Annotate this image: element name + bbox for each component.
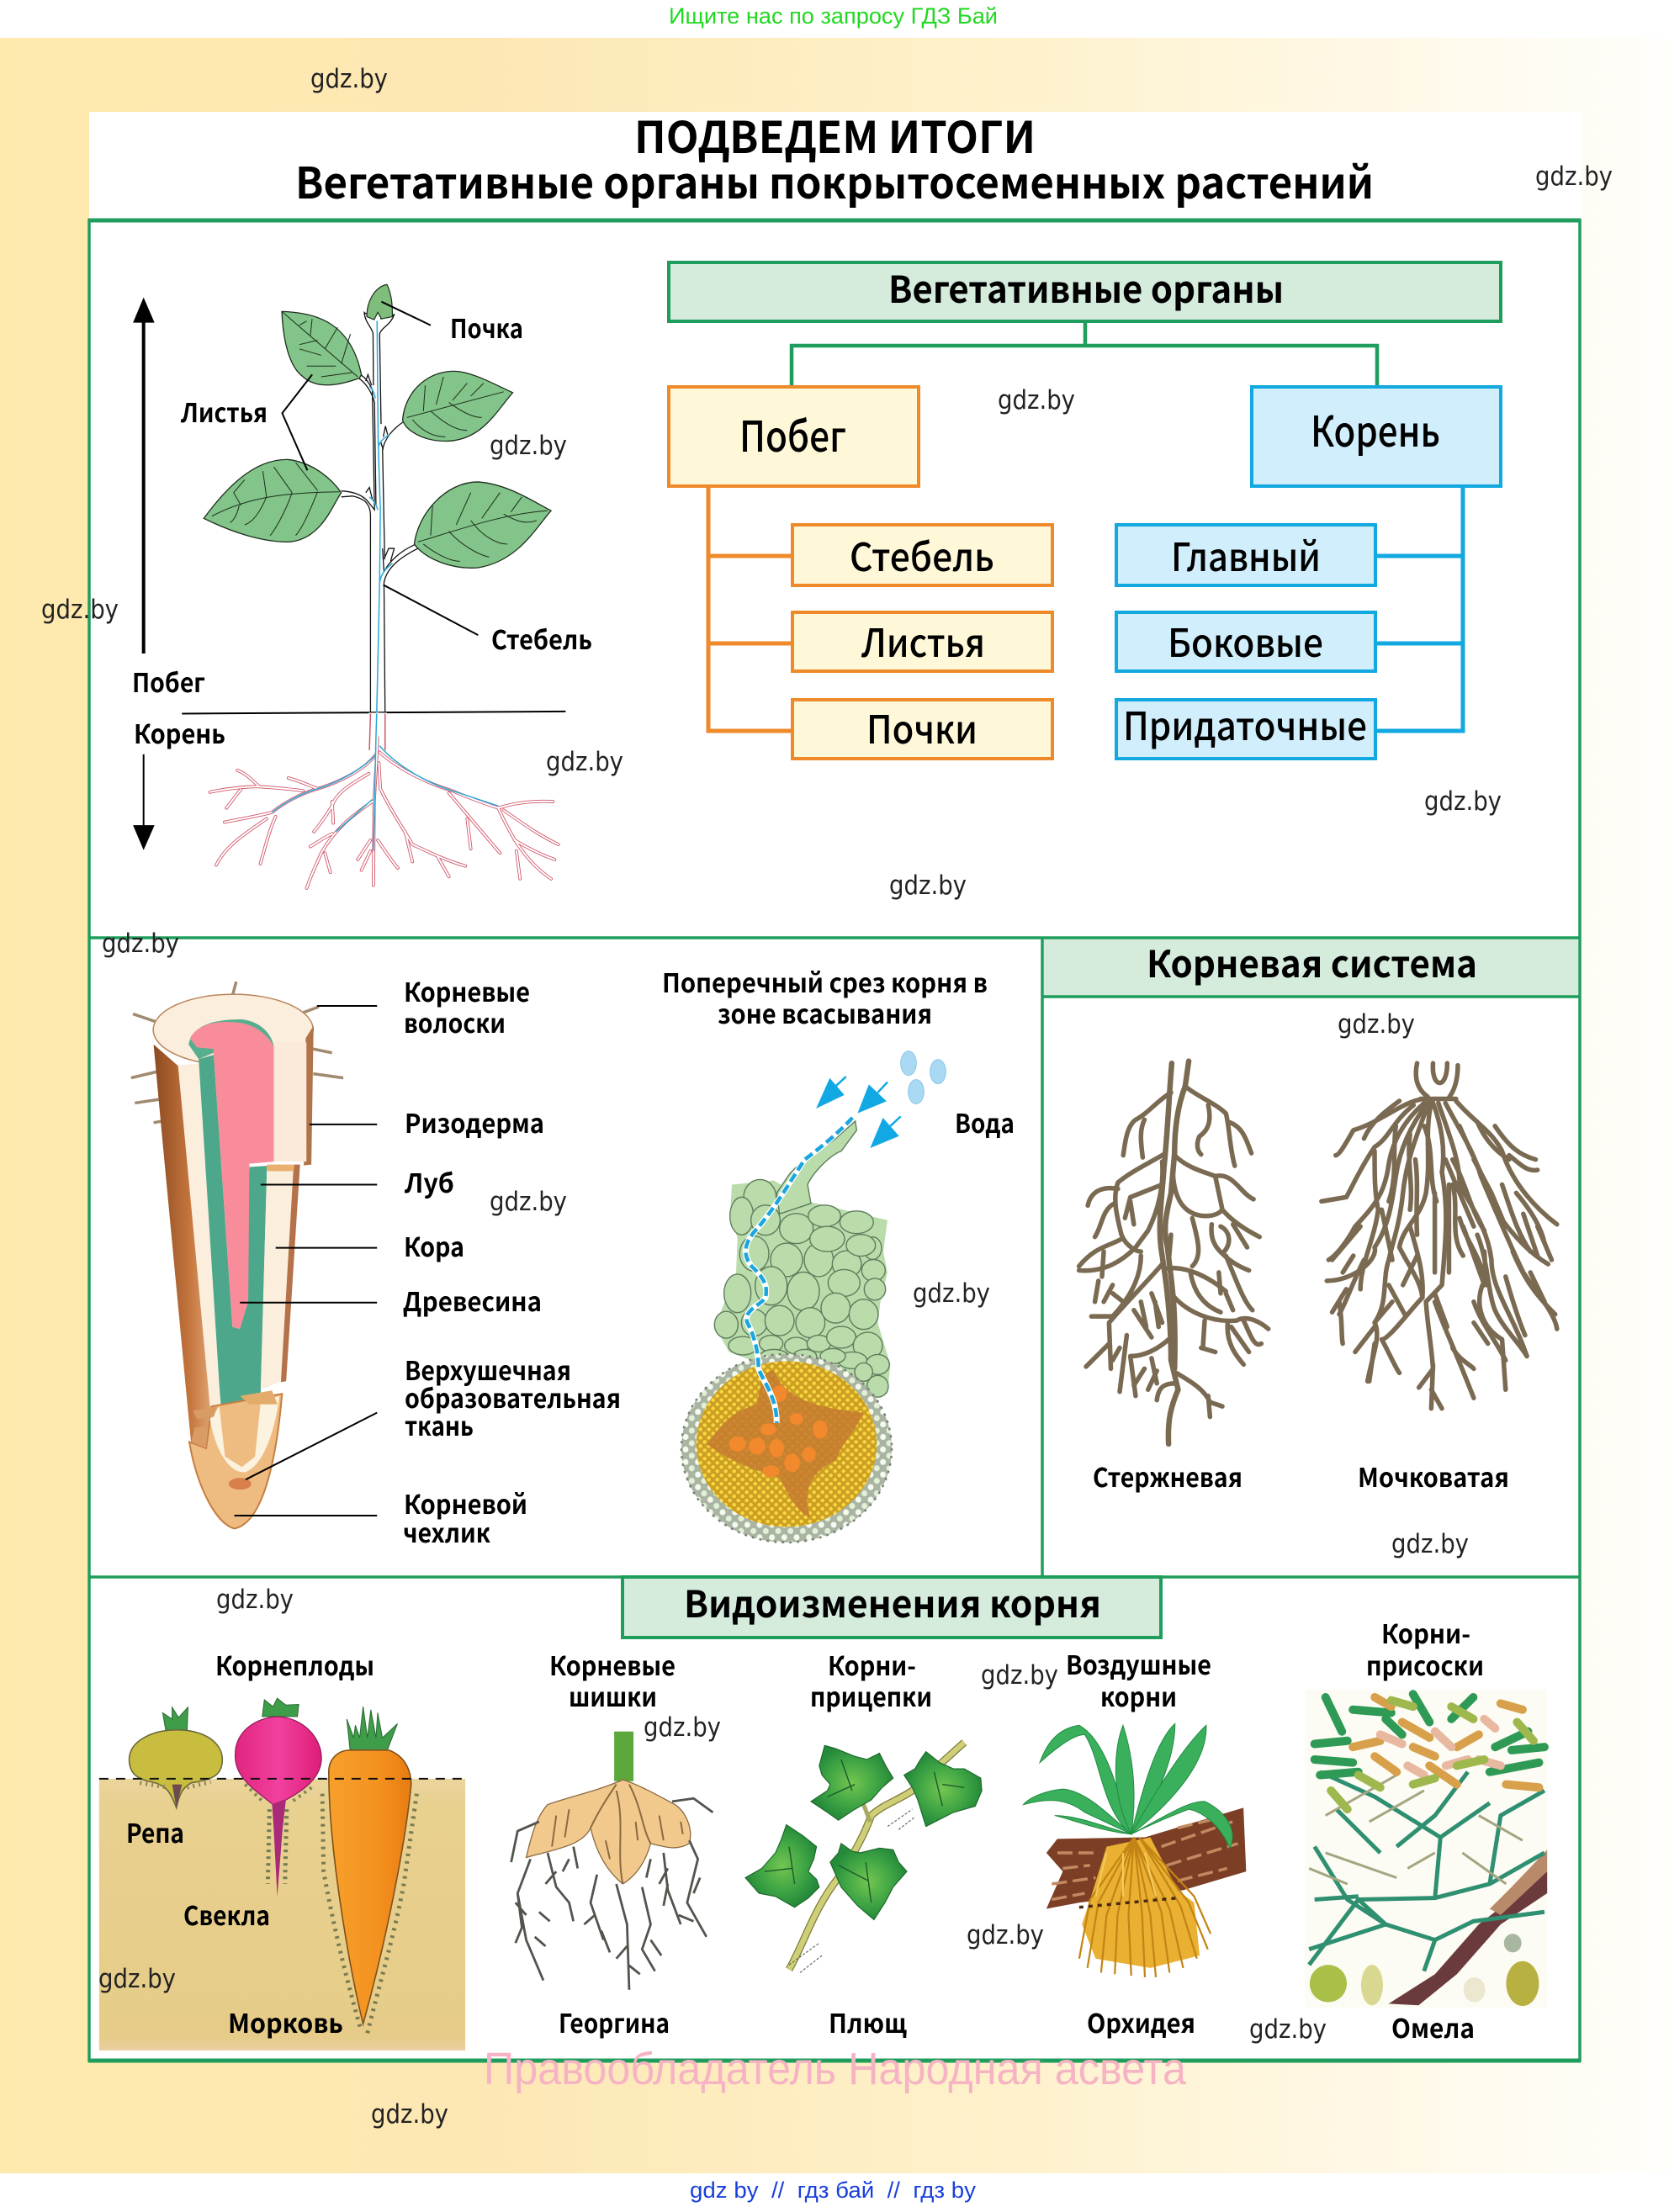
xylem pink: [190, 1022, 273, 1329]
root section labels: [403, 971, 621, 1550]
title: Вегетативные органы покрытосеменных растений: [295, 149, 1374, 211]
stem: [342, 312, 418, 713]
gdz.by watermarks: gdz.by: [490, 431, 567, 461]
root system labels: Мочковатая: [1358, 1457, 1509, 1495]
root system labels: [1093, 1457, 1509, 1495]
water arrows: [819, 1077, 901, 1146]
carrot: [322, 1707, 416, 2034]
bottom link text: gdz by // гдз бай // гдз by: [690, 2178, 977, 2203]
icon: mistletoe: [1305, 1690, 1547, 2008]
cross-section heading: зоне всасывания: [718, 993, 932, 1031]
gdz.by watermarks: gdz.by: [1535, 161, 1613, 192]
mistletoe labels: [1366, 1613, 1484, 2045]
gdz.by watermarks: gdz.by: [889, 871, 967, 901]
right cortex lower: [261, 1165, 295, 1389]
orchid labels: [1066, 1644, 1211, 2040]
arrow: root down: [133, 754, 155, 850]
icon: plant diagram: [133, 284, 565, 888]
blue connectors: [1375, 486, 1463, 731]
orchid labels: Воздушные: [1066, 1644, 1211, 1682]
root section labels: Корневые: [404, 971, 530, 1009]
water path: [746, 1118, 852, 1423]
cortex cells: [714, 1121, 889, 1397]
box: main root: [1116, 525, 1375, 585]
icon: root cross-section with water path: [681, 1051, 946, 1543]
modifications heading: [623, 1574, 1161, 1638]
root section labels: Верхушечная: [405, 1350, 571, 1388]
orchid labels: корни: [1100, 1676, 1177, 1714]
roots: [1082, 1837, 1200, 1968]
root hairs: [131, 982, 343, 1123]
bark: [1046, 1807, 1246, 1909]
box: main root: Главный: [1171, 527, 1321, 583]
root section labels: образовательная: [405, 1378, 621, 1416]
dahlia labels: шишки: [569, 1676, 657, 1714]
root system heading: Корневая система: [1147, 934, 1477, 988]
root section labels: ткань: [405, 1405, 474, 1443]
cross-section heading: [662, 962, 988, 1031]
gdz.by watermarks: gdz.by: [490, 1187, 567, 1217]
green connectors: [792, 321, 1377, 387]
bud: [367, 284, 392, 320]
leader lines: [282, 302, 478, 635]
green branches: [1309, 1772, 1544, 1971]
scheme heading: [669, 260, 1501, 321]
orchid labels: Орхидея: [1087, 2003, 1195, 2040]
title: ПОДВЕДЕМ ИТОГИ: [634, 103, 1036, 166]
root section labels: Кора: [404, 1226, 464, 1264]
icon: tap root system: [1079, 1061, 1269, 1444]
gdz.by watermarks: gdz.by: [1391, 1529, 1469, 1559]
modifications heading: Видоизменения корня: [684, 1574, 1101, 1628]
ivy labels: Корни-: [828, 1645, 916, 1683]
plant labels: Листья: [180, 392, 268, 430]
water label: Вода: [955, 1103, 1015, 1140]
turnip: [130, 1707, 222, 1807]
root crop labels: [126, 1645, 374, 2040]
cross-section heading: Поперечный срез корня в: [662, 962, 988, 1000]
water drops: [901, 1051, 946, 1103]
gdz.by watermarks: gdz.by: [967, 1920, 1044, 1950]
stele top green: [188, 1019, 273, 1059]
icon: root crops: [99, 1698, 465, 2051]
plant labels: Почка: [450, 308, 523, 346]
soil surface dashes: [99, 1778, 465, 1780]
box: adventitious roots: Придаточные: [1123, 696, 1367, 752]
ivy labels: прицепки: [810, 1676, 932, 1714]
root conducting tissue: [272, 713, 498, 851]
panel: vegetative organs scheme: [669, 260, 1501, 759]
gdz.by watermarks: gdz.by: [913, 1278, 990, 1309]
root section labels: Ризодерма: [405, 1103, 544, 1140]
gdz.by watermarks: gdz.by: [981, 1660, 1058, 1691]
box: leaves: [792, 612, 1052, 671]
top cut: [153, 994, 313, 1066]
mistletoe labels: Омела: [1391, 2008, 1475, 2045]
plant labels: [132, 308, 592, 751]
box: buds: Почки: [866, 700, 978, 755]
ivy labels: Плющ: [829, 2003, 907, 2040]
gdz.by watermarks: gdz.by: [546, 747, 623, 777]
leaf veins: [212, 311, 548, 561]
icon: dahlia tubers: [511, 1732, 713, 1990]
root section labels: чехлик: [403, 1512, 490, 1550]
host branch: [1389, 1871, 1547, 2005]
plant labels: Стебель: [491, 619, 592, 657]
gdz.by watermarks: gdz.by: [41, 595, 119, 625]
root cap: [189, 1394, 282, 1528]
cortex left: [178, 1063, 222, 1406]
mistletoe labels: Корни-: [1381, 1613, 1470, 1651]
root section labels: Древесина: [403, 1281, 542, 1319]
shoot box: [669, 387, 919, 486]
box: lateral roots: [1116, 612, 1375, 671]
gdz.by watermarks: gdz.by: [102, 929, 179, 959]
root crop labels: Корнеплоды: [215, 1645, 374, 1683]
icon: orchid: [1024, 1723, 1246, 1977]
arrow: shoot up: [133, 298, 155, 654]
leader lines: [235, 1006, 377, 1516]
root section labels: Луб: [404, 1162, 454, 1200]
root section labels: волоски: [404, 1003, 506, 1040]
leaves: [204, 311, 551, 568]
gdz.by watermarks: gdz.by: [644, 1712, 721, 1743]
root system labels: Стержневая: [1093, 1457, 1242, 1495]
box: buds: [792, 700, 1052, 759]
beet: [236, 1698, 321, 1897]
dahlia labels: Корневые: [549, 1645, 676, 1683]
scheme heading: Вегетативные органы: [888, 260, 1284, 314]
root crop labels: Морковь: [228, 2003, 343, 2040]
mistletoe labels: присоски: [1366, 1645, 1484, 1683]
dahlia labels: [549, 1645, 676, 2040]
soil: [99, 1779, 465, 2051]
gdz.by watermarks: gdz.by: [998, 385, 1075, 415]
root crop labels: Свекла: [183, 1895, 270, 1933]
stem conducting tissue: [369, 321, 392, 738]
cortex underlay: [715, 1180, 890, 1394]
gdz.by watermarks: gdz.by: [216, 1585, 294, 1615]
icon: fibrous root system: [1322, 1063, 1557, 1409]
gdz.by watermarks: gdz.by: [1338, 1009, 1415, 1040]
stele interior: [697, 1361, 877, 1527]
root box: Корень: [1311, 399, 1440, 459]
stele ring: [681, 1354, 892, 1543]
box: lateral roots: Боковые: [1168, 613, 1323, 669]
top link text: Ищите нас по запросу ГДЗ Бай: [669, 3, 998, 29]
leaves: [1024, 1723, 1232, 1848]
gdz.by watermarks: gdz.by: [371, 2099, 448, 2130]
gdz.by watermarks: gdz.by: [310, 64, 388, 94]
plant labels: Корень: [134, 713, 225, 751]
bark left: [154, 1045, 214, 1448]
white content sheet: [89, 112, 1582, 2061]
stele green: [199, 1055, 267, 1467]
box: stem: [792, 525, 1052, 585]
roots: [210, 713, 559, 888]
orange connectors: [708, 486, 792, 731]
dahlia labels: Георгина: [559, 2003, 670, 2040]
ivy labels: [810, 1645, 932, 2040]
plant labels: Побег: [132, 662, 205, 700]
icon: ivy: [745, 1743, 982, 1972]
root system heading: [1042, 934, 1580, 997]
title: [295, 103, 1374, 211]
right outer block: [304, 1025, 314, 1166]
copyright watermark: Правообладатель Народная асвета: [484, 2044, 1187, 2094]
meristem: [229, 1478, 252, 1490]
soil line: [182, 712, 565, 713]
box: stem: Стебель: [850, 527, 994, 583]
gdz.by watermarks: gdz.by: [1249, 2014, 1327, 2045]
gdz.by watermarks: gdz.by: [98, 1964, 176, 1994]
phloem and xylem core: [707, 1371, 864, 1517]
gdz.by watermarks: gdz.by: [1424, 786, 1502, 817]
root box: [1252, 387, 1501, 486]
inner tip: [210, 1396, 279, 1472]
foliage speckle: [1315, 1694, 1544, 1809]
shoot box: Побег: [739, 404, 846, 464]
root crop labels: Репа: [126, 1812, 184, 1850]
berries and flowers: [1310, 1965, 1347, 2003]
root section labels: Корневой: [404, 1484, 527, 1521]
panel frame with dividers: [88, 220, 1581, 2061]
box: leaves: Листья: [861, 613, 985, 669]
icon: longitudinal root section: [131, 982, 377, 1528]
